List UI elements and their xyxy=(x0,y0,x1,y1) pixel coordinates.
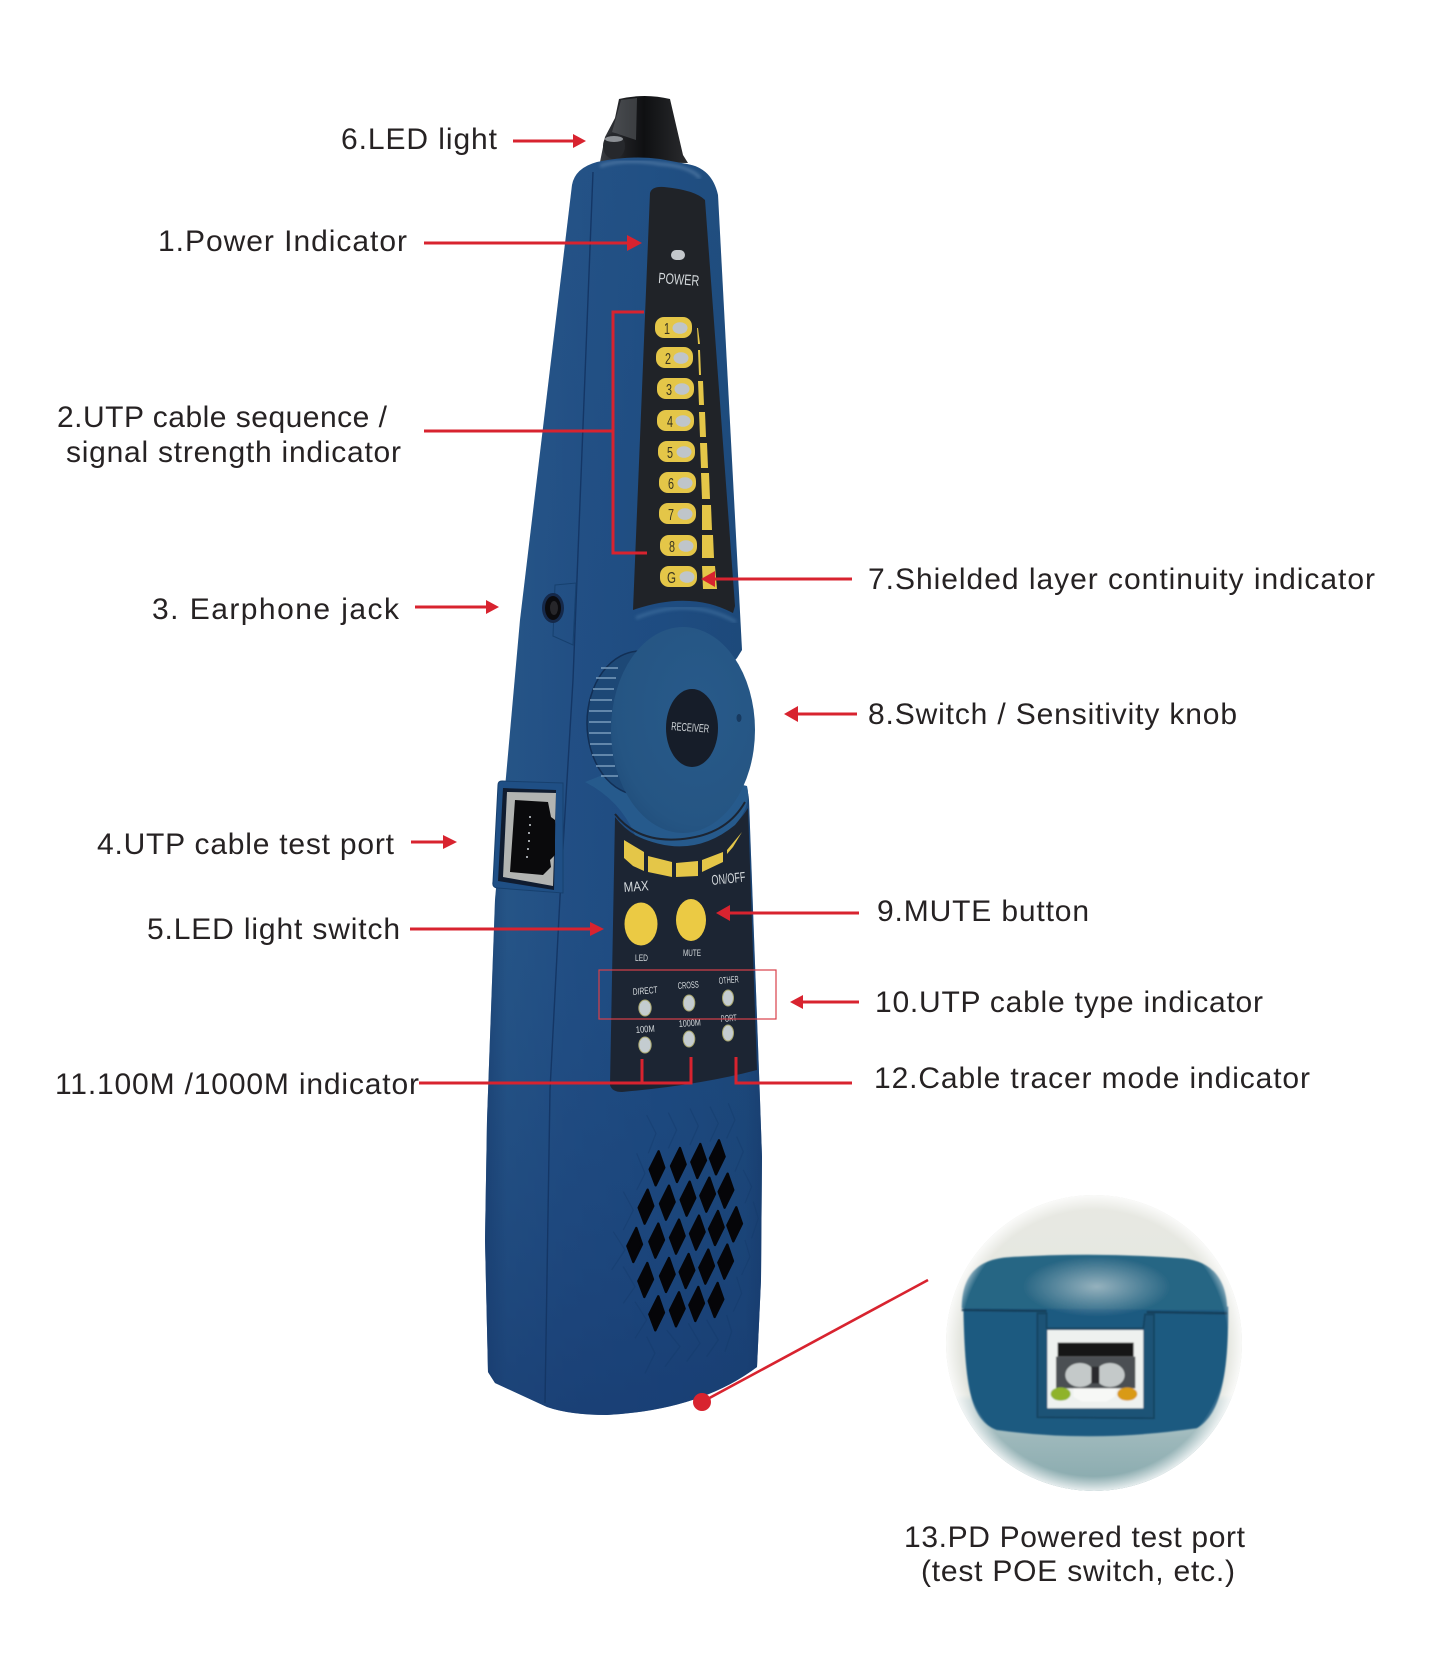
text: 10 cable type: 10.UTP cable type indicator xyxy=(875,986,1263,1019)
text: 5 LED light switch: 5.LED light switch xyxy=(147,913,400,946)
inset device shell lower xyxy=(963,1307,1228,1436)
LED light tip cap xyxy=(600,96,688,163)
status LEDs xyxy=(639,990,734,1053)
embossed hexagon pattern xyxy=(612,1103,758,1373)
button labels: CROSS xyxy=(677,980,699,992)
sequence LED row xyxy=(655,317,697,587)
sequence LED row: 5 xyxy=(667,445,673,462)
text: 7 shielded layer: 7.Shielded layer continuity indicator xyxy=(868,563,1375,596)
button labels: PORT xyxy=(720,1013,737,1025)
UTP test port xyxy=(493,781,563,893)
POWER label: POWER xyxy=(658,270,700,290)
knob xyxy=(585,627,755,846)
text: 8 switch knob: 8.Switch / Sensitivity knob xyxy=(868,698,1237,731)
arrow: 8 switch knob xyxy=(784,706,857,722)
text: 9 MUTE button: 9.MUTE button xyxy=(877,895,1089,928)
text: 13 PD port: 13.PD Powered test port xyxy=(904,1521,1246,1554)
device body shell xyxy=(485,158,762,1415)
arrow: 4 UTP test port xyxy=(411,835,457,849)
ridged ring xyxy=(587,651,693,795)
sequence LED row: 6 xyxy=(668,476,674,493)
RECEIVER label: RECEIVER xyxy=(671,721,710,736)
sequence LED row: 4 xyxy=(667,414,673,431)
ON/OFF label: ON/OFF xyxy=(711,869,746,888)
text: 4 UTP test port: 4.UTP cable test port xyxy=(97,828,395,861)
inset green LED xyxy=(1051,1387,1071,1401)
arrow: 9 MUTE button xyxy=(716,905,859,921)
inset amber LED xyxy=(1117,1387,1137,1401)
earphone jack xyxy=(542,583,576,645)
highlight box: cable type xyxy=(599,970,776,1019)
MAX label: MAX xyxy=(623,877,650,895)
arrow: 3 earphone jack xyxy=(415,600,499,614)
knob indicator dot xyxy=(736,714,742,722)
inset device shell upper xyxy=(962,1255,1227,1310)
text: 3 earphone jack: 3. Earphone jack xyxy=(152,593,400,626)
inset photo: PD powered test port xyxy=(940,1190,1250,1500)
button labels: MUTE xyxy=(683,948,701,959)
button labels: LED xyxy=(635,953,648,964)
text: 12 tracer mode: 12.Cable tracer mode indicator xyxy=(874,1062,1310,1095)
text: 13 PD port xyxy=(904,1521,1246,1588)
inset RJ45 jack xyxy=(1047,1330,1143,1408)
button labels: OTHER xyxy=(718,974,739,987)
text: 13 PD port: (test POE switch, etc.) xyxy=(921,1555,1235,1588)
button labels: DIRECT xyxy=(632,985,658,998)
MUTE button xyxy=(676,899,706,941)
sequence LED row: 1 xyxy=(664,321,670,338)
knob face xyxy=(611,627,755,833)
sequence LED row: 2 xyxy=(665,351,671,368)
text: 2 UTP sequence: 2.UTP cable sequence / xyxy=(57,401,388,434)
arrow: 5 LED light switch xyxy=(410,922,604,936)
inset port recess xyxy=(1037,1313,1154,1418)
bracket: 11 100M/1000M indicator xyxy=(419,1057,691,1083)
sequence LED row: 7 xyxy=(668,507,674,524)
bracket: 12 tracer mode xyxy=(736,1057,852,1083)
text: 11 100M/1000M indicator: 11.100M /1000M indicator xyxy=(55,1068,419,1101)
arrow: 7 shielded layer xyxy=(701,571,852,587)
LED button xyxy=(624,902,658,946)
speaker holes xyxy=(627,1140,742,1330)
bracket: 2 UTP sequence xyxy=(424,312,647,553)
device: cable tester receiver xyxy=(485,96,762,1415)
speaker grille xyxy=(612,1103,758,1373)
button labels xyxy=(632,948,739,1036)
text: 6 LED light: 6.LED light xyxy=(341,123,498,156)
lower control panel xyxy=(610,808,757,1092)
power LED xyxy=(671,250,685,260)
sequence LED row: G xyxy=(667,570,676,587)
signal strength bars xyxy=(697,328,717,589)
text: 2 UTP sequence: signal strength indicator xyxy=(66,436,401,469)
button labels: 1000M xyxy=(678,1017,701,1030)
receiver disc xyxy=(666,689,718,767)
text: 1 power indicator: 1.Power Indicator xyxy=(158,225,407,258)
text: 2 UTP sequence xyxy=(57,401,401,469)
upper indicator panel xyxy=(633,187,736,622)
sequence LED row: 3 xyxy=(666,382,672,399)
arrow: 10 cable type xyxy=(790,995,859,1009)
pointer: 13 PD port xyxy=(693,1280,928,1411)
sensitivity scale xyxy=(624,832,742,877)
arrow: 6 LED light xyxy=(513,134,586,148)
arrow: 1 power indicator xyxy=(424,235,642,251)
button labels: 100M xyxy=(635,1024,655,1036)
sequence LED row: 8 xyxy=(669,539,675,556)
